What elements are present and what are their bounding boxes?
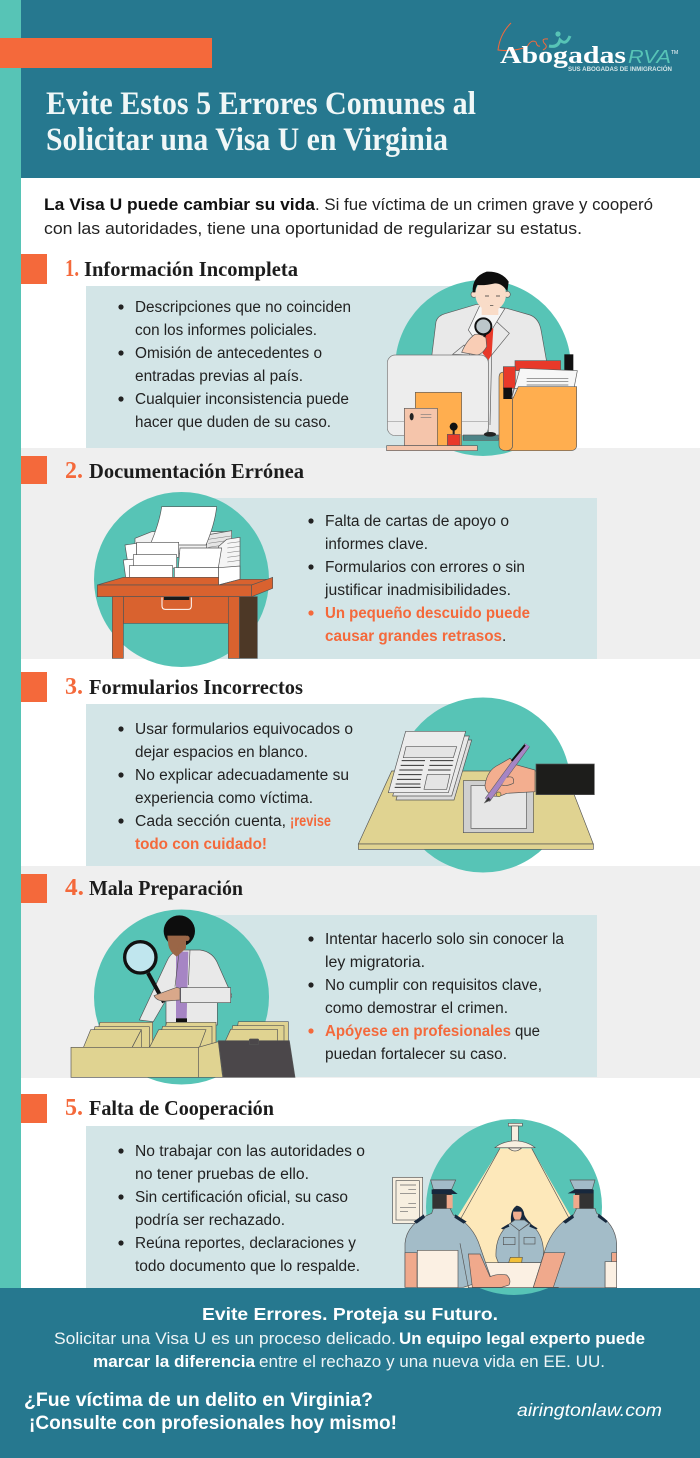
intro text (44, 195, 653, 238)
title: Solicitar una Visa U en Virginia (46, 122, 448, 158)
heading: 5. (65, 1095, 83, 1121)
text panel: No cumplir con requisitos clave, (325, 977, 542, 994)
text panel: Cualquier inconsistencia puede (135, 391, 349, 408)
footer body (54, 1330, 645, 1371)
text panel: Apóyese en profesionales (325, 1023, 511, 1040)
header banner (0, 0, 700, 178)
section 5 (21, 1094, 516, 1288)
logo: Abogadas (500, 43, 626, 69)
section 2 (21, 456, 597, 667)
text panel: justificar inadmisibilidades. (324, 582, 511, 599)
intro text: con las autoridades, tiene una oportunidad de regularizar su estatus. (44, 219, 582, 238)
intro text: La Visa U puede cambiar su vida (44, 195, 316, 214)
call to action (24, 1390, 397, 1434)
text panel: Usar formularios equivocados o (135, 721, 353, 738)
text panel: Un pequeño descuido puede (325, 605, 530, 622)
orange accent bar (0, 38, 212, 68)
heading: Documentación Errónea (89, 459, 304, 483)
text panel: todo documento que lo respalde. (135, 1258, 360, 1275)
website: airingtonlaw.com (517, 1400, 662, 1420)
text panel: ley migratoria. (325, 954, 425, 971)
illustration: man with magnifier and folder (387, 272, 577, 456)
title (46, 86, 476, 158)
footer heading: Evite Errores. Proteja su Futuro. (202, 1304, 498, 1324)
logo (498, 23, 678, 73)
footer body: entre el rechazo y una nueva vida en EE. UU. (259, 1353, 605, 1371)
intro text: . Si fue víctima de un crimen grave y cooperó (315, 195, 653, 214)
text panel (86, 286, 486, 448)
heading: Formularios Incorrectos (89, 675, 303, 699)
footer body: Un equipo legal experto puede (399, 1330, 645, 1348)
marker square (21, 254, 47, 284)
text panel (190, 915, 597, 1077)
text panel: que (515, 1023, 540, 1040)
text panel: no tener pruebas de ello. (135, 1166, 309, 1183)
footer body: marcar la diferencia (93, 1353, 256, 1371)
title: Evite Estos 5 Errores Comunes al (46, 86, 476, 122)
marker square (21, 874, 47, 903)
text panel: con los informes policiales. (135, 322, 317, 339)
text panel (190, 498, 597, 659)
text panel (86, 1126, 516, 1288)
heading: 2. (65, 458, 83, 484)
text panel: Descripciones que no coinciden (135, 299, 351, 316)
call to action: ¡Consulte con profesionales hoy mismo! (29, 1413, 397, 1434)
illustration: hand signing form on desk (358, 698, 594, 872)
section 3 (21, 672, 594, 872)
text panel: Formularios con errores o sin (325, 559, 525, 576)
marker square (21, 456, 47, 484)
text panel: Intentar hacerlo solo sin conocer la (325, 931, 564, 948)
footer body: Solicitar una Visa U es un proceso delicado. (54, 1330, 396, 1348)
text panel: dejar espacios en blanco. (135, 744, 308, 761)
text panel: entradas previas al país. (135, 368, 303, 385)
illustration: desk with paper stacks (94, 492, 273, 667)
text panel: como demostrar el crimen. (325, 1000, 508, 1017)
footer banner (0, 1288, 700, 1458)
heading: 3. (65, 674, 83, 700)
illustration: person searching files with magnifier (71, 910, 295, 1084)
section 1 (21, 254, 577, 456)
heading: Mala Preparación (89, 876, 243, 900)
text panel: Falta de cartas de apoyo o (325, 513, 509, 530)
text panel: informes clave. (325, 536, 428, 553)
call to action: ¿Fue víctima de un delito en Virginia? (24, 1390, 373, 1411)
text panel: Cada sección cuenta, (135, 813, 286, 830)
logo: RVA (628, 47, 671, 67)
marker square (21, 1094, 47, 1123)
text panel: podría ser rechazado. (135, 1212, 285, 1229)
text panel: puedan fortalecer su caso. (325, 1046, 507, 1063)
text panel: Reúna reportes, declaraciones y (135, 1235, 356, 1252)
text panel: experiencia como víctima. (135, 790, 313, 807)
heading: Información Incompleta (84, 257, 298, 281)
text panel: ¡revise (290, 813, 331, 830)
logo: TM (671, 50, 678, 56)
section 4 (21, 874, 597, 1084)
text panel: . (502, 628, 506, 645)
illustration: officers interviewing a woman under a lamp (393, 1119, 617, 1295)
text panel: hacer que duden de su caso. (135, 414, 331, 431)
text panel: causar grandes retrasos (325, 628, 502, 645)
text panel: No explicar adecuadamente su (135, 767, 349, 784)
logo: SUS ABOGADAS DE INMIGRACIÓN (568, 65, 672, 73)
marker square (21, 672, 47, 702)
heading: 1. (65, 256, 79, 282)
heading: 4. (65, 875, 84, 901)
text panel: No trabajar con las autoridades o (135, 1143, 365, 1160)
heading: Falta de Cooperación (89, 1096, 274, 1120)
text panel: Sin certificación oficial, su caso (135, 1189, 348, 1206)
text panel: Omisión de antecedentes o (135, 345, 322, 362)
text panel (86, 704, 486, 866)
text panel: todo con cuidado! (135, 836, 267, 853)
